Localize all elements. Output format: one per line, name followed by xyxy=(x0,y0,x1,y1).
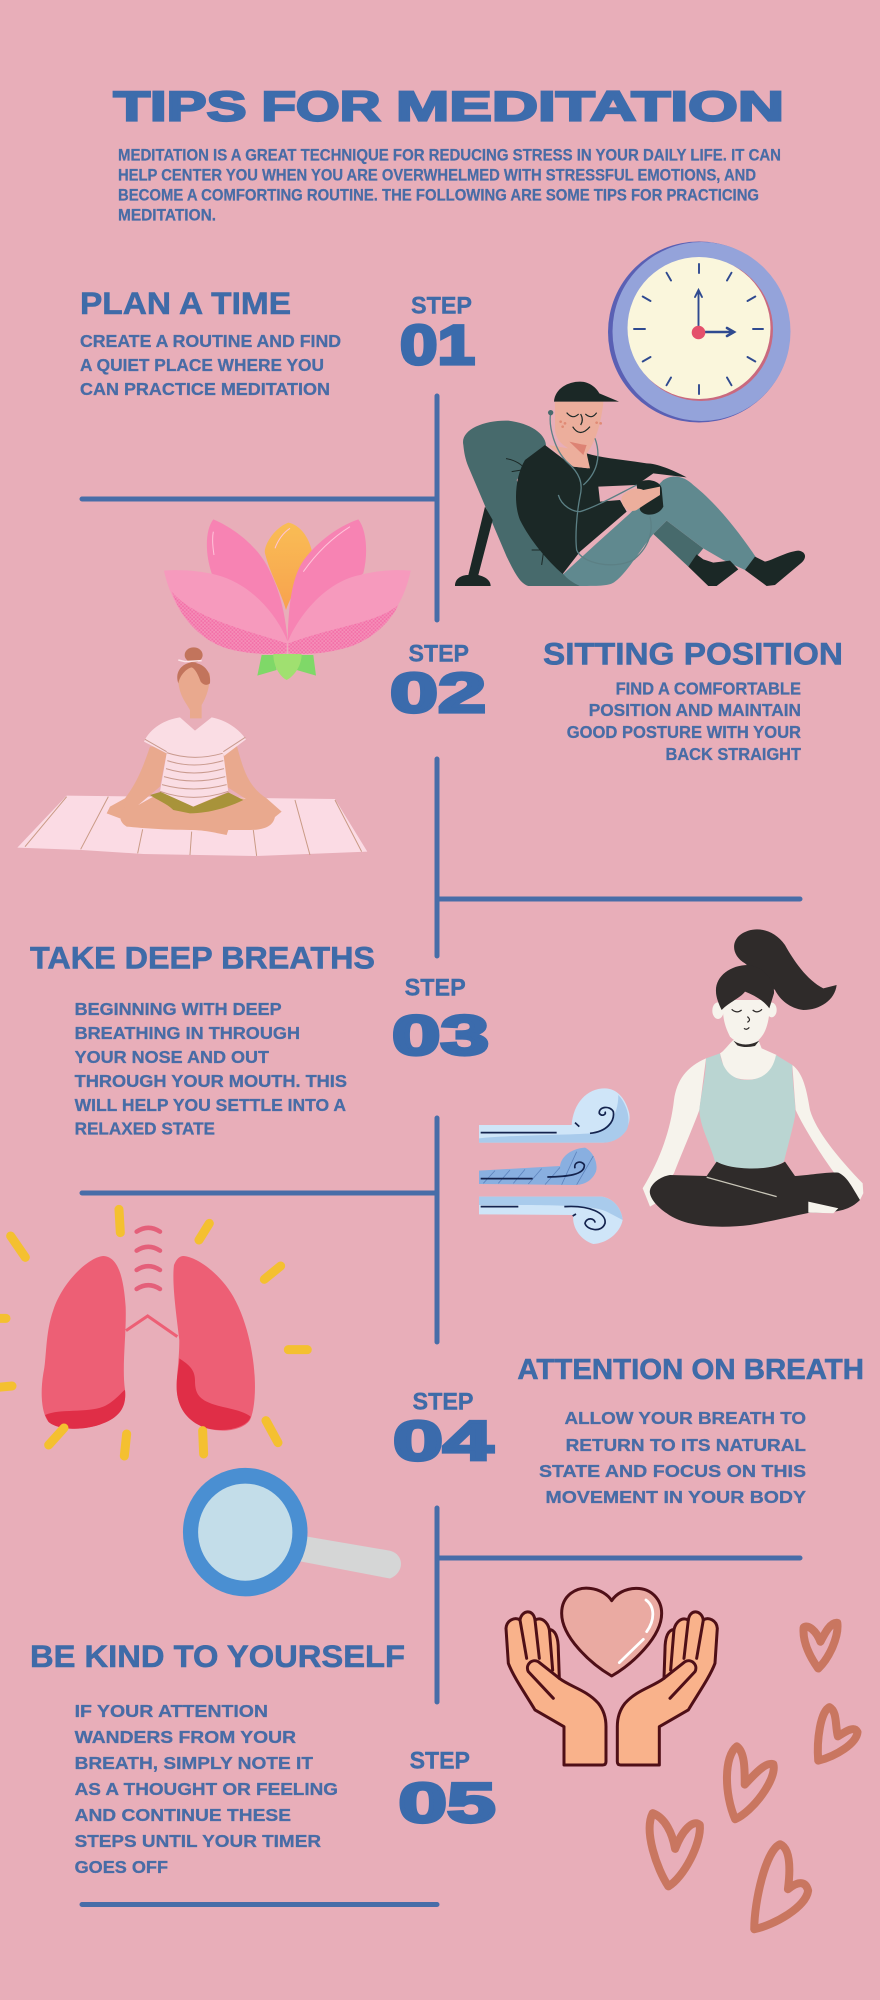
text: step 5 description: AS A THOUGHT OR FEELING xyxy=(75,1779,338,1799)
panel: step 2 sitting position xyxy=(390,636,843,764)
text: step 3 description xyxy=(75,999,347,1139)
text: step 1 description: A QUIET PLACE WHERE YOU xyxy=(80,355,324,375)
icon: magnifying glass xyxy=(183,1468,401,1596)
intro text block: BECOME A COMFORTING ROUTINE. THE FOLLOWING ARE SOME TIPS FOR PRACTICING xyxy=(118,187,759,205)
step number 03: 03 xyxy=(392,1004,489,1067)
heading: attention on breath: ATTENTION ON BREATH xyxy=(517,1354,864,1386)
text: step 3 description: BREATHING IN THROUGH xyxy=(75,1023,300,1043)
intro text block: MEDITATION IS A GREAT TECHNIQUE FOR REDUCING STRESS IN YOUR DAILY LIFE. IT CAN xyxy=(118,147,781,165)
title: FOR xyxy=(262,83,380,130)
illustration: breath puffs xyxy=(479,1088,630,1244)
intro text block: HELP CENTER YOU WHEN YOU ARE OVERWHELMED WITH STRESSFUL EMOTIONS, AND xyxy=(118,167,756,185)
text: step 2 description: GOOD POSTURE WITH YOUR xyxy=(567,722,801,742)
step label 1: STEP xyxy=(411,293,472,320)
title xyxy=(114,83,784,130)
decoration: outlined hearts xyxy=(650,1623,858,1929)
text: step 5 description: IF YOUR ATTENTION xyxy=(75,1701,268,1721)
text: step 3 description: YOUR NOSE AND OUT xyxy=(75,1047,269,1067)
text: step 3 description: BEGINNING WITH DEEP xyxy=(75,999,282,1019)
panel: step 1 plan a time xyxy=(80,285,475,399)
text: step 3 description: THROUGH YOUR MOUTH. THIS xyxy=(75,1071,347,1091)
text: step 5 description: BREATH, SIMPLY NOTE IT xyxy=(75,1753,313,1773)
title: TIPS xyxy=(114,83,246,130)
step number 04: 04 xyxy=(393,1409,493,1472)
step label 2: STEP xyxy=(408,641,469,668)
heading: sitting position: SITTING POSITION xyxy=(543,636,843,672)
text: step 4 description: MOVEMENT IN YOUR BODY xyxy=(546,1487,806,1507)
text: step 4 description xyxy=(539,1408,806,1507)
intro text block: MEDITATION. xyxy=(118,207,216,225)
text: step 4 description: RETURN TO ITS NATURAL xyxy=(566,1435,806,1455)
illustration: lotus flower xyxy=(164,519,411,680)
text: step 2 description: POSITION AND MAINTAIN xyxy=(589,700,801,720)
text: step 5 description: STEPS UNTIL YOUR TIMER xyxy=(75,1831,321,1851)
illustration: man sitting with earphones xyxy=(455,382,805,586)
text: step 4 description: ALLOW YOUR BREATH TO xyxy=(564,1408,806,1428)
heading: be kind to yourself: BE KIND TO YOURSELF xyxy=(30,1638,405,1674)
text: step 1 description: CAN PRACTICE MEDITATION xyxy=(80,379,330,399)
text: step 4 description: STATE AND FOCUS ON THIS xyxy=(539,1461,806,1481)
illustration: woman meditating on mat xyxy=(17,647,367,856)
heading: take deep breaths: TAKE DEEP BREATHS xyxy=(30,940,375,976)
timeline connector lines xyxy=(82,396,800,1904)
text: step 5 description xyxy=(75,1701,338,1877)
text: step 5 description: GOES OFF xyxy=(75,1857,168,1877)
title: MEDITATION xyxy=(396,83,784,130)
text: step 2 description xyxy=(567,678,801,764)
step number 05: 05 xyxy=(398,1771,496,1834)
step label 3: STEP xyxy=(405,975,466,1002)
step number 01: 01 xyxy=(400,313,475,376)
step label 5: STEP xyxy=(410,1748,470,1775)
step label 4: STEP xyxy=(412,1389,474,1416)
text: step 3 description: RELAXED STATE xyxy=(75,1119,215,1139)
intro text block xyxy=(118,147,781,225)
text: step 3 description: WILL HELP YOU SETTLE INTO A xyxy=(75,1095,346,1115)
step number 02: 02 xyxy=(390,661,486,724)
panel: step 3 take deep breaths xyxy=(30,940,489,1139)
text: step 5 description: AND CONTINUE THESE xyxy=(75,1805,291,1825)
heading: plan a time: PLAN A TIME xyxy=(80,285,291,321)
icon: wall clock xyxy=(608,242,790,422)
illustration: lungs with rays xyxy=(0,1209,307,1456)
text: step 1 description xyxy=(80,331,341,399)
text: step 5 description: WANDERS FROM YOUR xyxy=(75,1727,296,1747)
icon: hands holding heart xyxy=(506,1588,717,1765)
panel: step 5 be kind to yourself xyxy=(30,1638,496,1877)
illustration: woman meditating with ponytail xyxy=(643,929,863,1227)
text: step 2 description: BACK STRAIGHT xyxy=(666,744,801,764)
text: step 1 description: CREATE A ROUTINE AND FIND xyxy=(80,331,341,351)
text: step 2 description: FIND A COMFORTABLE xyxy=(616,678,801,698)
panel: step 4 attention on breath xyxy=(393,1354,864,1507)
